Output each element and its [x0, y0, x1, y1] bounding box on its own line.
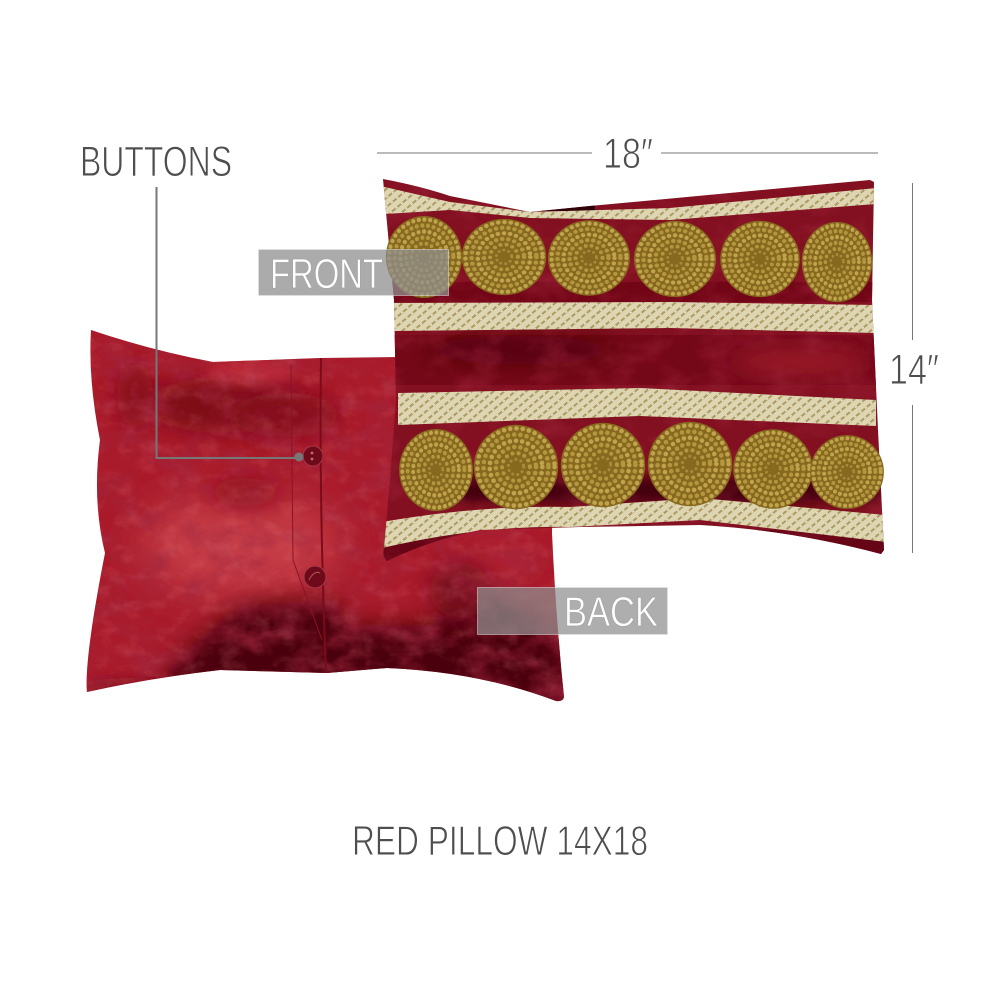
dimension: width 18 inches: 18″: [603, 130, 653, 178]
back pillow: [86, 330, 564, 702]
label: back: BACK: [564, 588, 658, 635]
dimension: height 14 inches: 14″: [889, 346, 939, 394]
label: front: FRONT: [270, 250, 383, 297]
upper row of gold medallions: [386, 216, 872, 302]
callout: buttons: [80, 138, 304, 462]
icon: lower button: [304, 566, 326, 588]
front pillow: [375, 170, 890, 565]
caption: RED PILLOW 14X18: [352, 817, 648, 864]
callout: buttons: BUTTONS: [80, 138, 232, 186]
label: back: [478, 588, 668, 635]
lower row of gold medallions: [399, 422, 884, 511]
icon: upper button: [303, 446, 323, 466]
